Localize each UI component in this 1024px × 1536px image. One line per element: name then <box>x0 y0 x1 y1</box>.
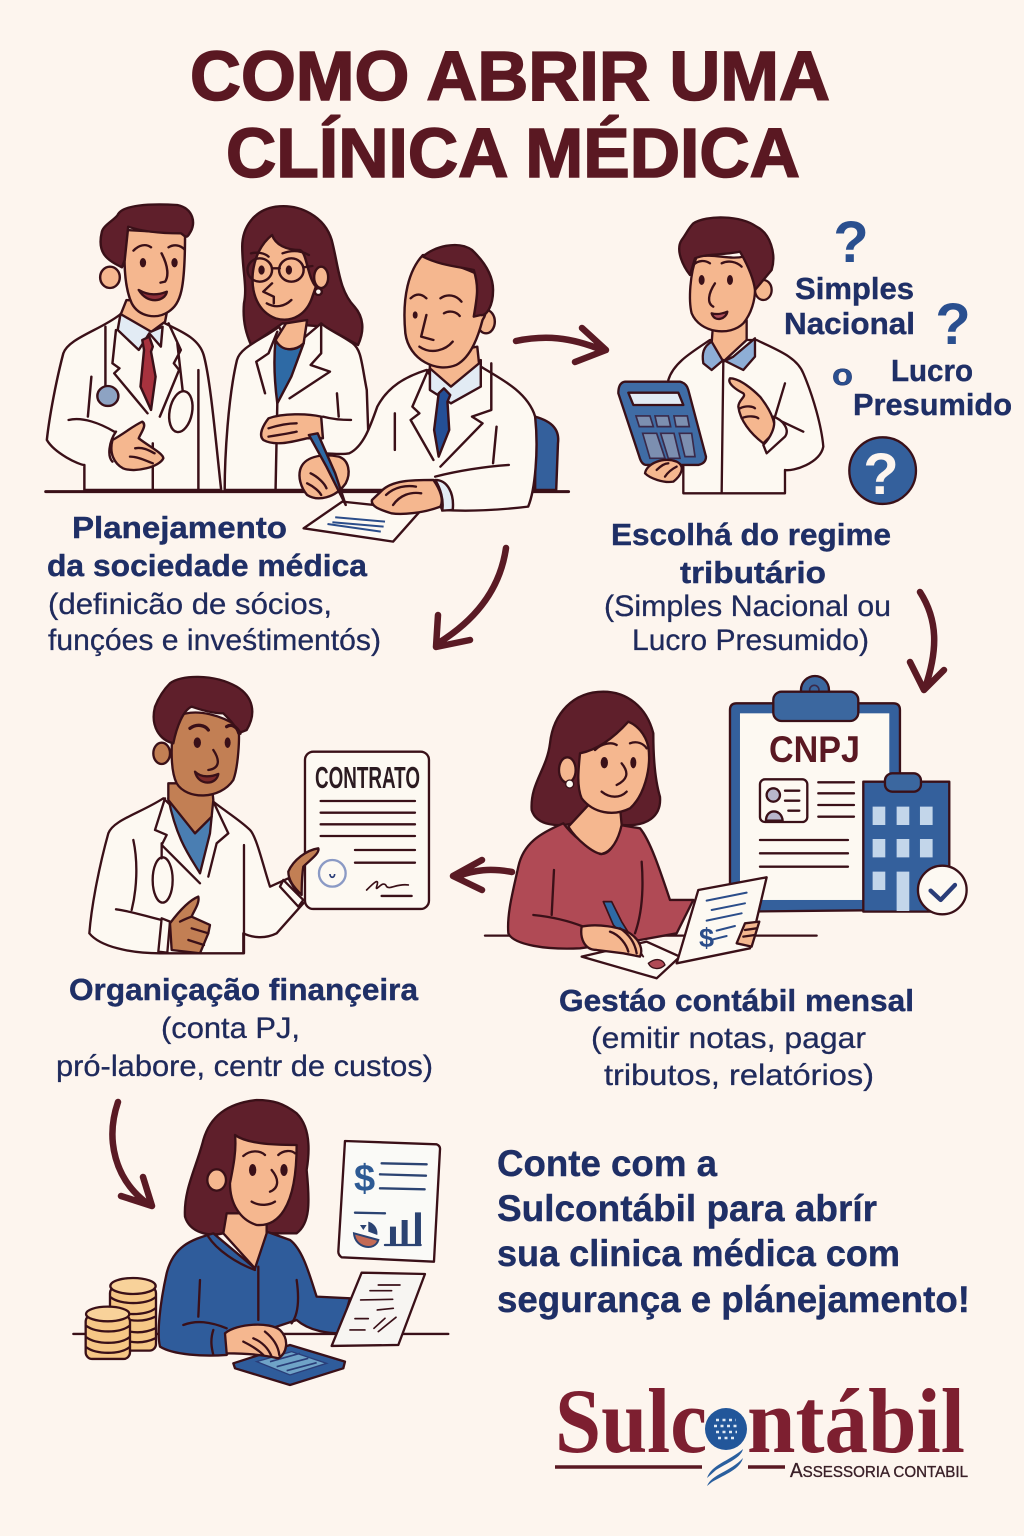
seated doctor signing <box>299 245 558 542</box>
text: step 3: pró-labore, centr de custos) <box>56 1050 433 1083</box>
CONTRATO label: CONTRATO <box>315 760 420 795</box>
call to action: Sulcontábil para abrír <box>497 1188 877 1229</box>
text: step 3: (conta PJ, <box>161 1012 300 1045</box>
panel: regime illustration <box>618 217 916 504</box>
text: step 1: (definicão de sócios, <box>48 588 332 621</box>
regime options <box>784 210 1012 507</box>
regime options: ? <box>935 292 971 357</box>
text: step 1: Planejamento <box>72 510 287 545</box>
call to action: Conte com a <box>497 1143 717 1184</box>
text: step 4: tributos, relatórios) <box>604 1059 874 1092</box>
regime options: o <box>832 357 853 392</box>
text: step 2: Lucro Presumido) <box>632 624 869 657</box>
title: CLÍNICA MÉDICA <box>226 114 800 192</box>
panel: planejamento illustration <box>46 204 568 542</box>
text: step 4 <box>559 983 914 1092</box>
text: step 1: funçóes e inveśtimentós) <box>48 624 381 657</box>
icon: coin stacks <box>86 1278 156 1359</box>
regime options: Presumido <box>853 387 1012 422</box>
panel: financeiro illustration <box>73 1100 448 1385</box>
doctor with glasses <box>225 206 370 490</box>
dollar sign on invoice: $ <box>699 923 714 953</box>
arrow: step 1 to step 5 <box>436 548 506 647</box>
panel: contrato illustration <box>89 677 429 953</box>
text: step 1 <box>47 510 381 657</box>
arrow: step 3 to step 5 <box>112 1102 152 1206</box>
logo: Sulcontábil: Sulc <box>555 1370 707 1472</box>
regime options: Lucro <box>891 353 973 388</box>
call to action: segurança e plánejamento! <box>497 1279 970 1320</box>
call to action <box>497 1143 970 1320</box>
document: contract <box>305 752 429 909</box>
text: step 4: (emitir notas, pagar <box>591 1022 866 1055</box>
logo: Sulcontábil: ASSESSORIA CONTABIL <box>790 1460 968 1482</box>
text: step 4: Gestáo contábil mensal <box>559 983 914 1018</box>
logo: Sulcontábil <box>555 1370 968 1486</box>
text: step 2: tributário <box>680 555 826 590</box>
call to action: sua clinica médica com <box>497 1233 900 1274</box>
icon: CNPJ clipboard <box>730 676 900 912</box>
woman with calculator <box>159 1100 350 1385</box>
regime options: Simples <box>795 271 914 306</box>
document: financial report <box>338 1141 440 1262</box>
regime options: Nacional <box>784 306 915 341</box>
doctor with red tie <box>47 204 221 490</box>
woman at desk <box>508 692 767 978</box>
regime options: ? <box>863 442 899 507</box>
text: step 2 <box>604 517 891 657</box>
title: COMO ABRIR UMA <box>190 37 830 115</box>
text: step 2: Escolhá do regime <box>611 517 891 552</box>
arrow: step 1 to step 2 <box>516 328 606 362</box>
text: step 3: Organiçação finançeira <box>69 972 419 1007</box>
CNPJ label: CNPJ <box>769 729 860 770</box>
regime options: ? <box>833 210 869 275</box>
text: step 1: da sociedade médica <box>47 548 368 583</box>
document: paper on desk <box>332 1273 425 1346</box>
icon: calculator <box>618 382 706 465</box>
icon: building <box>863 773 967 914</box>
panel: contabil illustration <box>485 676 967 978</box>
arrow: gestao to contrato <box>453 860 512 890</box>
text: step 3 <box>56 972 433 1083</box>
logo: Sulcontábil: ntábil <box>747 1370 965 1472</box>
dollar sign on report: $ <box>354 1158 375 1200</box>
arrow: step 2 to CNPJ <box>910 592 944 690</box>
text: step 2: (Simples Nacional ou <box>604 590 891 623</box>
title <box>190 37 830 192</box>
